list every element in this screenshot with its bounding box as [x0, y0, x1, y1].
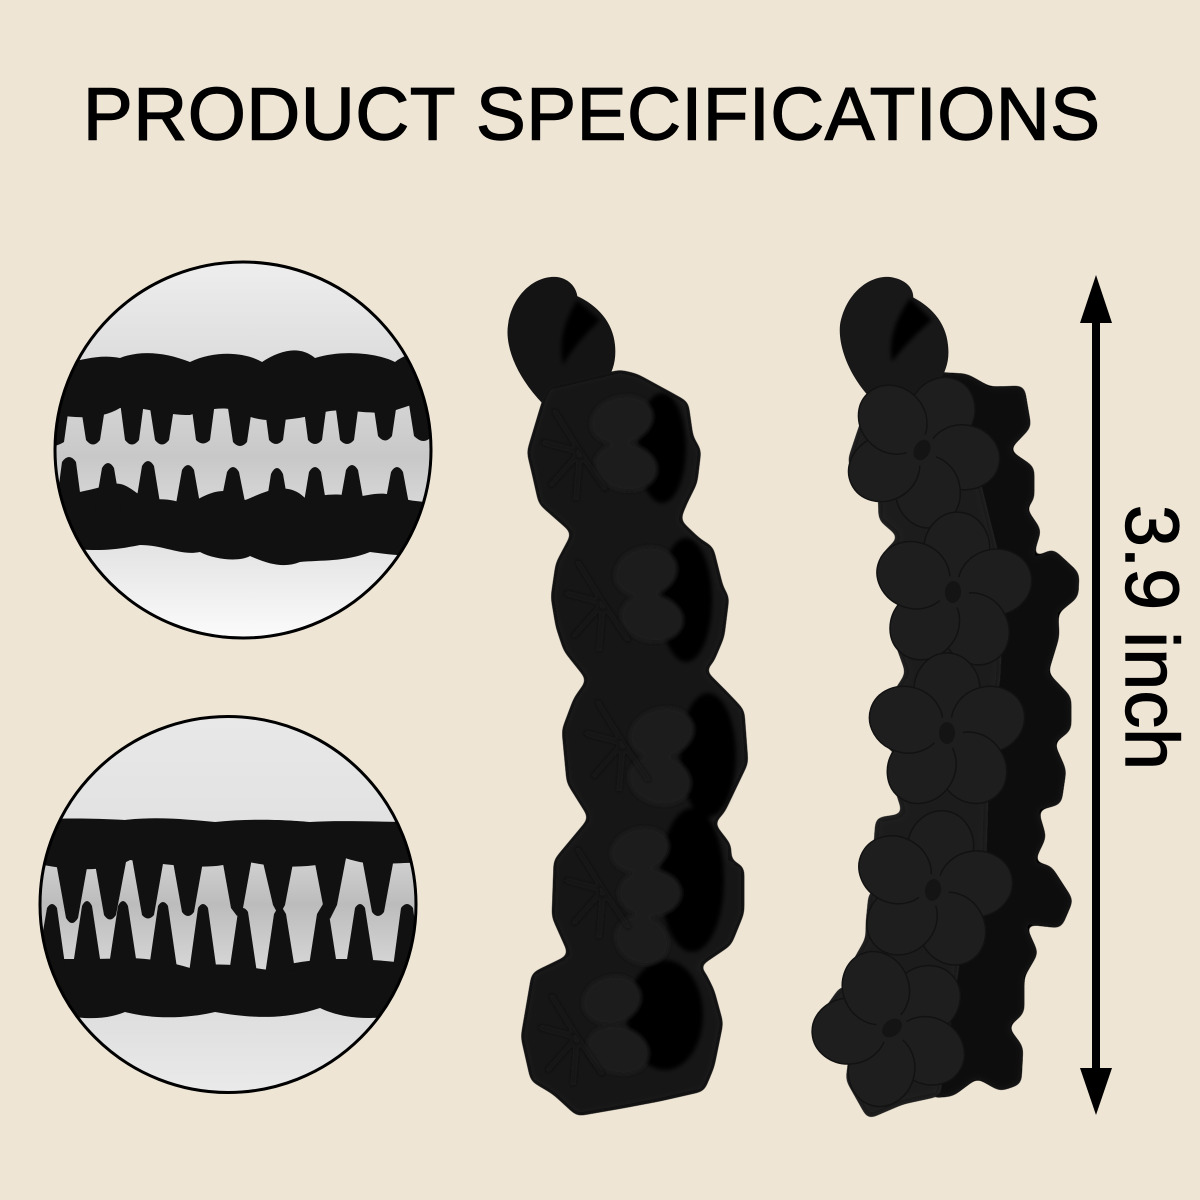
hook crease: [561, 300, 600, 365]
title: PRODUCT SPECIFICATIONS: [83, 72, 1100, 156]
flowers: [772, 341, 1046, 1148]
lower interlocking teeth: [30, 901, 422, 1018]
upper toothed edge: [40, 350, 450, 446]
circle: top view of clip teeth: [40, 262, 450, 638]
clip hook: [507, 277, 615, 425]
front fill behind flowers: [819, 396, 1005, 1119]
right clip: five-petal flower front: [772, 277, 1079, 1148]
clip silhouette: [521, 370, 748, 1116]
dark inner back layer: [627, 393, 736, 1070]
raised petals: [577, 389, 700, 1081]
clip back silhouette: [930, 372, 1079, 1098]
left clip: pinwheel flower front: [507, 277, 748, 1116]
dimension label: 3.9 inch: [1110, 505, 1194, 770]
hook crease: [891, 298, 932, 362]
upper interlocking teeth: [30, 818, 420, 923]
arrow: height dimension: [1080, 275, 1112, 1115]
lower toothed edge: [59, 457, 422, 566]
petal seams: [539, 410, 649, 1085]
clip hook: [840, 277, 948, 425]
circle: side view of clip teeth: [30, 716, 422, 1092]
